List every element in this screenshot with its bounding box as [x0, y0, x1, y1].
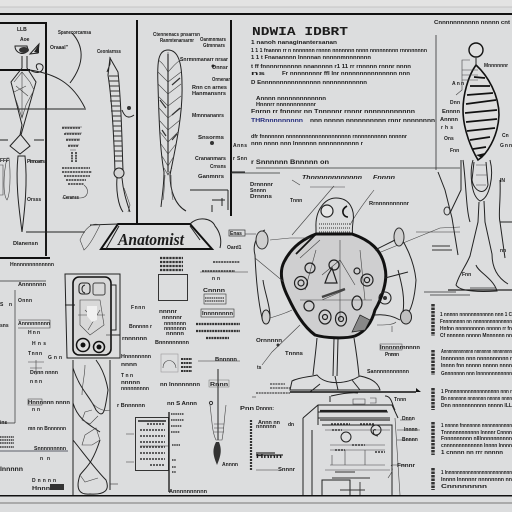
panel: notes beside machine: Hnnn [256, 454, 282, 460]
paragraph one: D Ennnnnnnnnnnnnnnn nnnnnnnnnnnn [251, 80, 367, 86]
goblet diagram: Ceranss [63, 195, 79, 201]
grid block [160, 258, 183, 270]
small left notes: Tnnn [290, 198, 302, 204]
panel: machine diagram: Innnn [404, 427, 418, 433]
panel: machine diagram [303, 393, 420, 495]
grouped labels: nnnn [121, 362, 137, 368]
panel: main heading and body text [251, 26, 435, 166]
panel: spine specimen [50, 30, 134, 212]
panel: far right tick block [251, 397, 256, 470]
panel: left column labels: Snnnnnnnnn [34, 446, 66, 452]
small left notes: Drnnnnr [250, 182, 273, 188]
panel: left column labels: Dnnn nnnn [30, 370, 58, 376]
panel: left column labels: nn [32, 407, 40, 413]
paragraph three: dfr fnnnnnnn nnnnnnnnnnnnnnnnnnnn rnnnnnnnnnn nnnnnr [251, 134, 407, 140]
grouped labels: nnnnn [166, 331, 184, 337]
callouts [256, 175, 460, 375]
right figure labels: rhs [441, 125, 453, 131]
paragraph three: nnn nnnn nnn Innnnnn nnnnnnnnnnn r [251, 141, 363, 147]
panel: machine diagram: Dnnn [402, 416, 415, 422]
small blocks right [196, 262, 248, 363]
paragraph one: 1 1 1 fnannn rr n nnnnnnn rnnnn nnnnnnn nnnn nnnnnnnnn rnnnnnnnn [251, 48, 427, 54]
grouped labels [117, 305, 200, 409]
data table: Annnnnnnnnn [169, 489, 207, 495]
grouped labels: nnnnn [121, 380, 140, 386]
figure labels [0, 27, 45, 247]
grouped labels: rnnnnnn [122, 336, 147, 342]
banner title [80, 219, 221, 250]
paragraph one: 1 1 t Fnanannnn Innnnan nnnnnmnnnnnnn [251, 55, 371, 61]
block 5: Innnn Innnnnr nnnnnnnn nn [441, 477, 512, 483]
small blocks right: nn [212, 276, 220, 282]
callouts: Pnnnn [385, 352, 399, 358]
block 2: Innnnnnn nnn nnnnnnnnnn r [441, 356, 512, 362]
small left notes [233, 143, 302, 204]
fish labels: Mmnnananrs [192, 113, 224, 119]
panel: left column labels: sns [0, 323, 9, 329]
block 5 [433, 468, 512, 490]
right limb [375, 228, 416, 332]
paragraph two: Hnnnrr nnnnnnnnnnnr [256, 102, 316, 108]
figure labels: Dlanensn [13, 241, 38, 247]
panel: left column labels: Hnn [28, 330, 40, 336]
panel: notes beside machine: Snnnr [278, 467, 295, 473]
banner side label: Oard1 [227, 245, 242, 251]
panel: notes beside machine: dn [288, 422, 294, 428]
banner title: Anatomist [117, 230, 185, 249]
panel: machine diagram: Bnnnn [402, 437, 418, 443]
right figure labels: Cn [502, 133, 509, 139]
fish labels: Gtmnnars [203, 43, 225, 49]
grouped labels: Fnnn [131, 305, 145, 311]
block 2 [433, 349, 512, 377]
fish labels [153, 32, 230, 212]
small left notes: r Snn [233, 156, 247, 162]
small left notes: Snnnn [250, 188, 266, 194]
block 4: Fnnnnnnnnn nlllnnnnnnnnnn [441, 436, 512, 442]
panel: right text blocks [433, 304, 512, 490]
paragraph two: nnn nnnnn nnnnnnnnnn rnnr nnnnnnnn [310, 118, 435, 124]
fish figure [158, 50, 186, 211]
figure labels: LLB [17, 27, 27, 33]
panel: left column labels: Hnnn [32, 486, 50, 492]
block 1 [433, 304, 512, 339]
panel: device diagram [65, 274, 120, 358]
block 3 [433, 388, 512, 410]
panel: turtle creature [254, 175, 460, 393]
arrow plant: Rnnn [210, 382, 228, 388]
arrow plant: Pnn [240, 406, 254, 412]
right figure labels: Ons [444, 136, 454, 142]
right figure labels: Mnnnnnnr [484, 63, 508, 69]
small blocks right: Cnnnn [203, 288, 225, 294]
panel: left column labels: Annnnnnn [18, 282, 46, 288]
grouped labels: nnnnnnn [164, 321, 186, 327]
figure torso and leg [0, 56, 85, 232]
panel: left column labels: Hnnnnnnnnnnnnn [10, 262, 54, 268]
paragraph one [251, 40, 427, 86]
label: Oraaal" [50, 45, 69, 51]
callouts: ts [257, 365, 262, 371]
figure labels: Pinnoarrs [27, 159, 45, 165]
paragraph one: ns [251, 71, 266, 77]
small left notes: Drnnns [250, 194, 272, 200]
arrow plant [209, 369, 254, 468]
block 3: Dnn nnnnnnnnnnn nnnnn ILL [441, 403, 512, 409]
small left notes: Anns [233, 143, 247, 149]
panel: left column labels: Hns [32, 341, 46, 347]
callouts: Fnnnn [373, 175, 395, 181]
subheading: r Snnnnnn Bnnnnn on [251, 160, 329, 166]
paragraph two [251, 96, 435, 124]
panel: left column labels: Onnn [18, 298, 32, 304]
label: Spanecorcamsa [58, 30, 91, 36]
figure labels: Aoe [20, 37, 30, 43]
panel: right figure [416, 20, 512, 295]
grouped labels: nnnnnnnnn [121, 386, 149, 392]
right figure labels: Gnn [500, 143, 512, 149]
grouped labels: Bnnnnnnnnn [155, 340, 189, 346]
panel: left column labels: Dnnnn [32, 478, 56, 484]
fish labels: Onnsr [212, 65, 228, 71]
fish labels: Ganmnrs [198, 174, 224, 180]
fish labels: Snrmnmanarr nrsar [180, 57, 228, 63]
right figure labels [440, 63, 512, 278]
panel: left column labels: ins [0, 420, 7, 426]
panel: notes beside machine: nnnnnn [256, 424, 276, 430]
paragraph one: Fr nnnnnnnnr ffl lnr nnnnnnnnnnnnnnn nnn [282, 71, 410, 77]
right figure labels: Fnn [462, 272, 471, 278]
grouped labels: r Bnnnnnn [117, 403, 145, 409]
goblet diagram [62, 127, 92, 201]
callouts: Rrnnnnnnnnnr [369, 201, 409, 207]
small blocks right: Innnnnnnn [202, 311, 233, 317]
callouts: Sannnnnnnnnnn [367, 369, 409, 375]
right figure labels: Ann [452, 81, 464, 87]
right figure labels: Dnn [450, 100, 460, 106]
block 4: 1 cnnnn nn rrr nnnnn [441, 450, 503, 456]
fish labels: Ctennenacs pnsarrsn [153, 32, 200, 38]
fish labels: Ormenar [212, 77, 230, 83]
grouped labels: nnnnnnn [164, 326, 186, 332]
block 5: Cnnnnnnnn [441, 484, 487, 490]
panel: right figure: Cnnnnnnnnnnn nnnnn cnt [434, 20, 510, 26]
paragraph three [251, 134, 407, 147]
callouts: Ornnnnn [256, 338, 282, 344]
paragraph two: Fnrnn rr fnnnnr nn Tnnnnnr rnnnr nnnnnnnnnnnn [251, 109, 415, 115]
fish labels: Oanmnmars [200, 37, 226, 43]
grouped labels: Hnnnnnnnn [121, 354, 151, 360]
body [416, 58, 512, 295]
banner side label: Enas [230, 231, 242, 237]
callouts: Innnnnrnnnnn [380, 345, 420, 351]
panel: left column labels: Gnn [48, 355, 62, 361]
fish labels: Hanmansnrs [192, 91, 226, 97]
callouts: Tnnns [285, 351, 303, 357]
panel: fish specimen [153, 32, 230, 212]
heading: NDWIA IDBRT [252, 26, 348, 39]
grouped labels: Tnn [121, 373, 133, 379]
figure labels: FFF [0, 158, 9, 164]
panel: tube column [73, 360, 118, 495]
banner side label [227, 230, 256, 251]
panel: machine diagram: Tnnn [394, 397, 406, 403]
callouts: Thnnnnnnnnnnnn [302, 175, 362, 181]
panel: left figure [0, 23, 86, 256]
right figure labels: Ennnn [442, 109, 460, 115]
figure labels: Orsss [27, 197, 41, 203]
block 2: Innnn fnn nnnnn nnnnn nnnn [441, 363, 512, 369]
head circle [469, 43, 483, 57]
panel: left column labels: Tnnn [28, 351, 42, 357]
block 4: cnnnnnnnnnnnnn Innnn Innnn [441, 443, 512, 449]
fish labels: Rnn cn arnes [192, 85, 227, 91]
panel: left column labels: Hnnnnnn nnnn [28, 400, 70, 406]
paragraph one: 1 nanoh nanaginantersanan [251, 40, 337, 46]
label: Ceoniarnss [97, 49, 121, 55]
paragraph one: t ff fnnnnrnnnnnn nnannnnn r1 11 rr rnnnnn rnnnr nnnn [251, 64, 411, 70]
arrow plant: Annnn [222, 462, 238, 468]
panel: left column labels: mn nn Bnnnnnn [28, 426, 66, 432]
grouped labels: nnnnnr [162, 315, 182, 321]
grouped labels: nn S Annn [167, 401, 197, 407]
small drawing [161, 354, 192, 372]
right figure labels: Fnn [450, 148, 459, 154]
fish labels: Crananmars [195, 156, 226, 162]
spine figure [107, 57, 134, 212]
panel: notes beside machine: Dnnnn: [256, 406, 274, 412]
fish labels: Ranmtenarsarnr [160, 38, 194, 44]
panel: left column labels: nn [40, 456, 50, 462]
grouped labels: Bnnnnn r [129, 324, 152, 330]
paragraph two: THRnnnnnnnnn [251, 118, 303, 124]
right figure labels: IN [500, 178, 505, 184]
data table [126, 412, 207, 495]
left limb [254, 230, 312, 324]
paragraph two: Annnn nnnnnnnnnnnnn [256, 96, 326, 102]
panel: machine diagram: Fnnnr [397, 463, 415, 469]
grouped labels: nnnnr [159, 309, 177, 315]
panel: notes beside machine: Annn nn [258, 420, 280, 426]
fish labels: Crnsns [210, 164, 226, 170]
panel: left column labels: Innnnn [0, 467, 23, 473]
panel: notes beside machine [256, 406, 295, 473]
block 1: Cf nnnnnn nnnnn Mnnnnnn nn [440, 333, 512, 339]
icon: figure head [15, 44, 39, 54]
panel: centre labels [117, 258, 254, 495]
fish labels: Snsorms [198, 135, 224, 141]
shell [281, 234, 391, 338]
right figure labels: Annnn [440, 117, 458, 123]
head [316, 198, 354, 238]
right figure labels: nn [500, 248, 506, 254]
panel: left column labels: Sn [0, 302, 12, 308]
panel: left column labels: nnn [30, 379, 42, 385]
legs and base [256, 338, 421, 393]
small blocks right: Bnnnnn [215, 357, 237, 363]
panel: left column labels: Annnnnnnnn [18, 321, 50, 327]
block 4 [433, 422, 512, 456]
panel: left column labels [0, 258, 70, 492]
square figure [158, 274, 188, 300]
grouped labels: nn Innnnnnnn [160, 382, 200, 388]
